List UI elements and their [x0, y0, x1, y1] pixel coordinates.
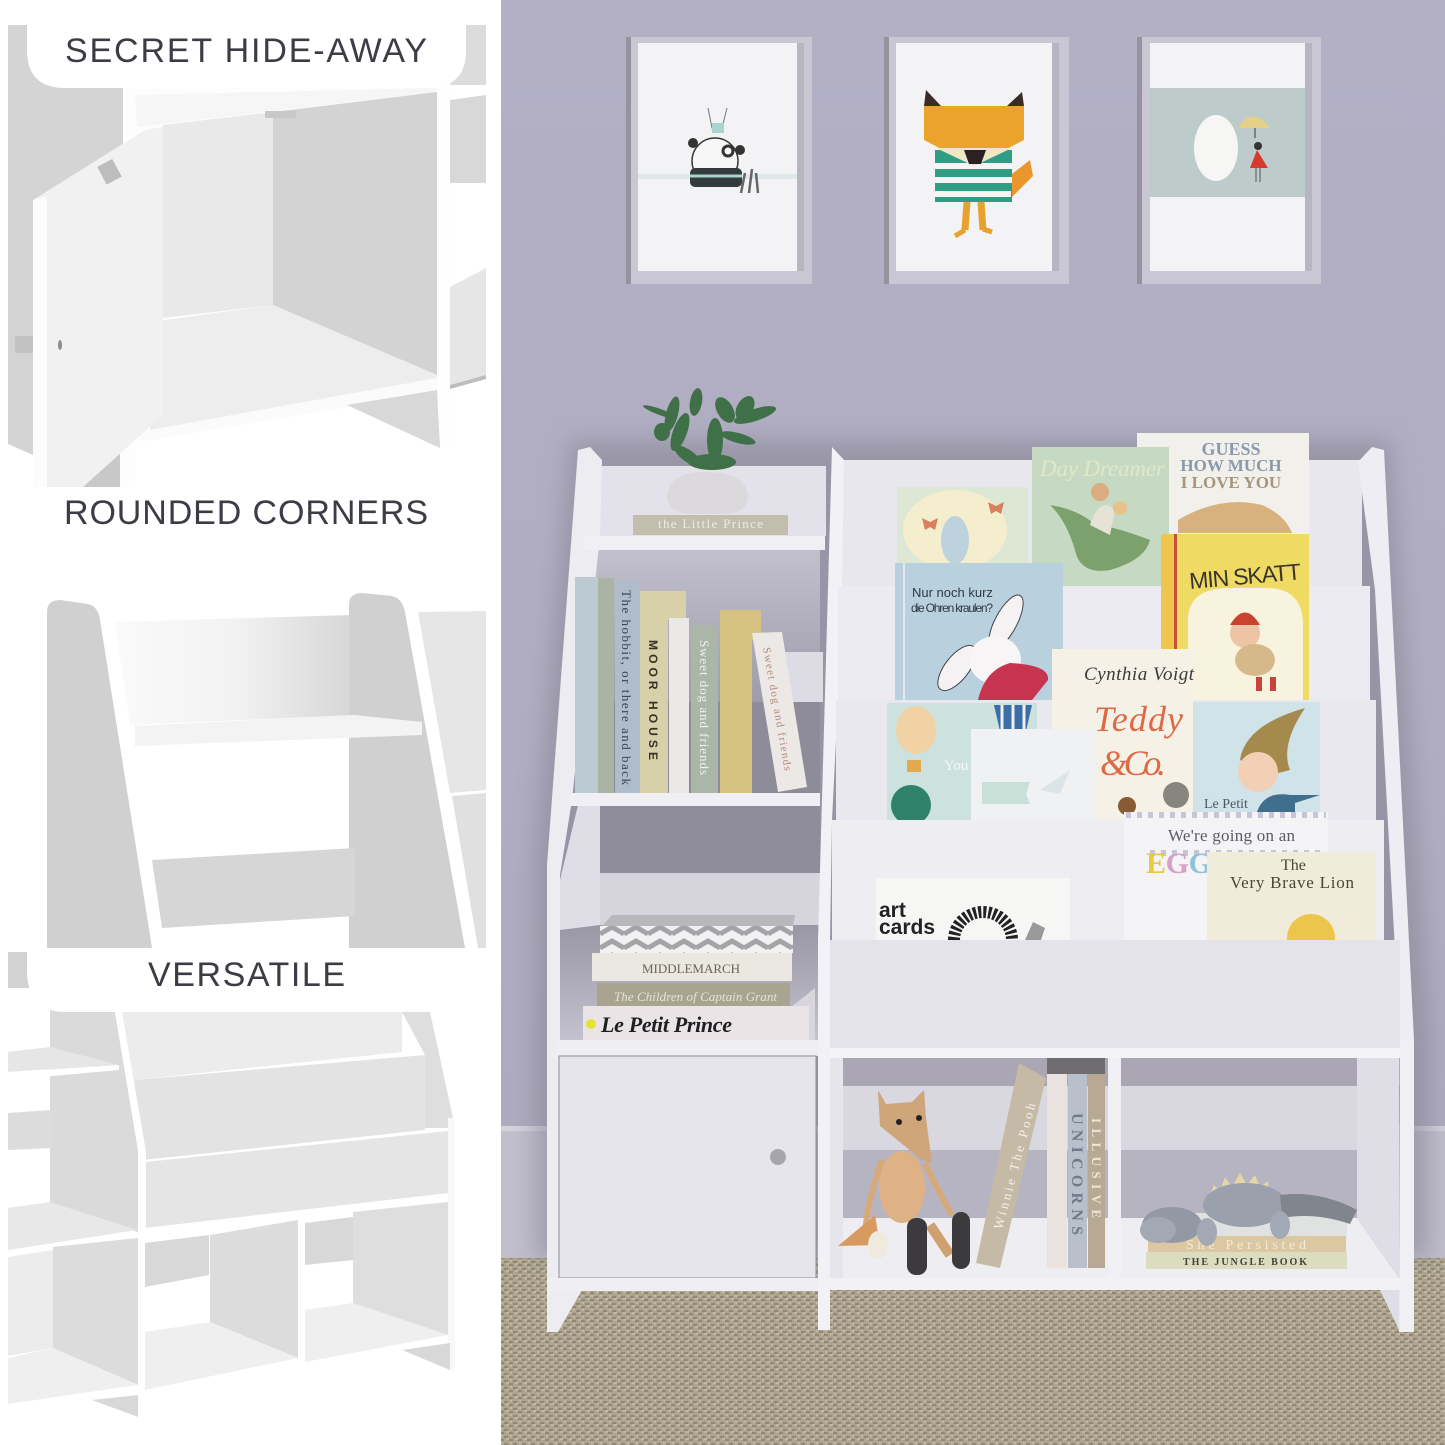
baseboard [501, 1126, 1445, 1260]
book: The Little Prince [633, 515, 788, 535]
toy fox [838, 1090, 970, 1275]
book: Guess How Much I Love You: GUESS [1201, 439, 1261, 459]
book: The Very Brave Lion [1207, 852, 1376, 962]
book: pale illustrated cover [971, 729, 1095, 821]
book: butterfly cover [897, 487, 1028, 587]
book: Nur noch kurz die Ohren kraulen: die Ohren kraulen? [911, 601, 993, 615]
book: Min Skatt [1161, 534, 1309, 700]
book: Cynthia Voigt Teddy & Co [1052, 649, 1195, 821]
book: art cards: cards [879, 916, 935, 939]
book: Is Petit child cover [1193, 702, 1320, 820]
books: lower shelf upright: UNICORNS [1068, 1113, 1085, 1235]
book: art cards [876, 878, 1070, 940]
books: upright stack: MOOR HOUSE [646, 640, 660, 760]
heading: secret hide-away: SECRET HIDE-AWAY [65, 32, 427, 70]
book: Guess How Much I Love You: HOW MUCH [1180, 456, 1282, 475]
book: The Very Brave Lion: The [1281, 857, 1306, 874]
bookcase: right unit back panel [818, 447, 1414, 1040]
heading: versatile [8, 950, 486, 1012]
books: lower shelf stack: She Persisted [1186, 1238, 1306, 1253]
carpet [501, 1258, 1445, 1445]
panel: rounded corners [47, 593, 486, 948]
book: Day Dreamer: Day Dreamer [1039, 456, 1166, 481]
heading: rounded corners: ROUNDED CORNERS [64, 494, 428, 532]
books: horizontal stack [583, 915, 815, 1040]
book: Cynthia Voigt Teddy & Co: Cynthia Voigt [1084, 664, 1195, 685]
tier panel 2 [838, 586, 1370, 702]
books: lower shelf upright: ILLUSIVE [1089, 1118, 1104, 1218]
toy dinosaur [1140, 1173, 1357, 1246]
books: upright stack: Sweet dog and friends [697, 640, 712, 775]
book: Day Dreamer [1032, 447, 1169, 588]
panel: versatile [8, 1005, 455, 1417]
books: lower shelf stack: THE JUNGLE BOOK [1183, 1257, 1307, 1268]
books: horizontal stack: The Children of Captain Grant [614, 989, 777, 1004]
cabinet door [559, 1056, 816, 1278]
books: upright stack: The hobbit, or there and back [619, 590, 634, 786]
book: Is Petit child cover: Le Petit [1204, 797, 1248, 812]
book: Guess How Much I Love You [1137, 433, 1309, 588]
book: Min Skatt: MIN SKATT [1188, 558, 1302, 594]
books: lower shelf upright: Winnie The Pooh [990, 1101, 1039, 1231]
book: We're going on an egg hunt: We're going on an [1168, 826, 1296, 845]
heading: secret hide-away [27, 0, 466, 88]
heading: versatile: VERSATILE [148, 956, 345, 994]
book: We're going on an egg hunt: EGG [1146, 847, 1212, 880]
tier panel 3 [836, 700, 1376, 822]
framed print: bear with umbrella [1137, 37, 1321, 284]
book: balloon cover [887, 703, 1037, 825]
book: Cynthia Voigt Teddy & Co: Teddy [1094, 699, 1183, 739]
book: We're going on an egg hunt [1124, 812, 1328, 940]
panel: secret hide-away [8, 25, 486, 487]
books: horizontal stack: Le Petit Prince [600, 1012, 732, 1037]
books: upright stack: Sweet dog and friends [760, 646, 794, 772]
book: Cynthia Voigt Teddy & Co: &Co. [1100, 743, 1166, 783]
book: Nur noch kurz die Ohren kraulen [895, 563, 1063, 700]
book: Guess How Much I Love You: I LOVE YOU [1181, 473, 1281, 492]
books: horizontal stack: MIDDLEMARCH [642, 961, 740, 976]
book: art cards: art [879, 899, 906, 922]
books: lower shelf upright [976, 1058, 1105, 1268]
bookcase: left unit [547, 447, 826, 1332]
plant [642, 387, 778, 514]
books: upright stack [575, 577, 807, 793]
bookcase: right unit trough and cubbies [818, 940, 1414, 1332]
book: The Very Brave Lion: Very Brave Lion [1230, 873, 1354, 892]
wall [501, 0, 1445, 1130]
panel: room photo [501, 0, 1445, 1445]
framed print: panda [626, 37, 812, 284]
books: lower shelf stack [1146, 1213, 1347, 1269]
book: balloon cover: You [944, 758, 969, 774]
framed print: fox [884, 37, 1069, 284]
book: Nur noch kurz die Ohren kraulen: Nur noch kurz [912, 585, 993, 600]
book: The Little Prince: the Little Prince [658, 516, 763, 531]
tier panel 4 [832, 820, 1384, 942]
